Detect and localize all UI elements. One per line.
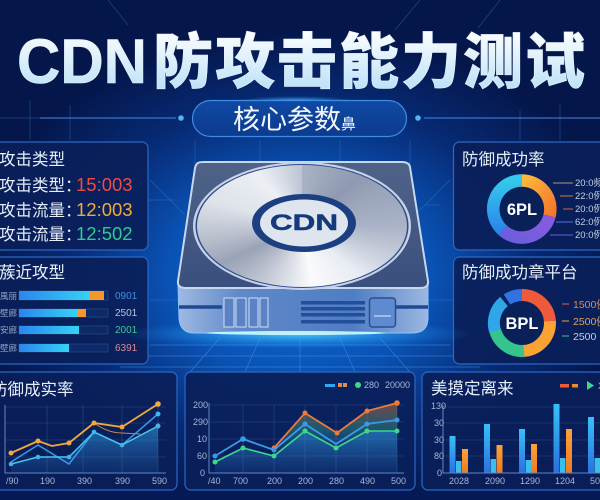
CDN badge [252,194,356,252]
base light [206,331,386,335]
vents [224,298,268,327]
line chart 1: /90 [6,476,19,486]
donut chart 1 [493,180,550,238]
bar chart 3: 0 [437,468,442,478]
heading: chart 3: 美摸定离来 [431,379,514,398]
legend [325,380,410,390]
line chart 1: 190 [40,476,55,486]
subtitle pill [40,96,600,136]
port button [370,298,396,327]
line chart 1: 590 [152,476,167,486]
donut legend 1 [550,177,600,241]
bar chart: 壁廊 [0,343,18,353]
legend [560,381,600,391]
line chart 2: 60 [197,451,207,461]
title: 防攻击能力测试 [153,29,587,96]
bar chart: 風丽 [0,291,18,301]
heading: platform: 防御成功章平台 [462,263,578,282]
bar chart: 壁廊 [0,308,18,318]
bar chart: 6391 [115,343,138,354]
line chart 2: 200 [267,476,282,486]
donut chart 2 [494,295,550,351]
line chart 2: 700 [233,476,248,486]
bar chart 3: 1290 [520,476,540,486]
disc [193,162,411,290]
bar chart 3: 130 [431,401,446,411]
line chart 2: /40 [208,476,221,486]
heading: attack type: 攻击类型 [0,150,65,169]
legend: 280 [364,380,379,390]
glow [123,319,473,349]
line chart 2: 200 [193,400,208,410]
bar chart 3 [431,401,600,486]
metric rows: 攻击流量： [0,225,82,244]
panel: defense success rate [454,142,600,250]
metric rows: 攻击类型： [0,176,82,195]
line chart 2: 280 [329,476,344,486]
panel: attack type [0,142,148,250]
line chart 2 [193,400,406,486]
donut legend 2: 2500 [573,331,597,343]
legend: 20000 [385,380,410,390]
bar chart 3: 1204 [555,476,575,486]
panel: line chart 1 [0,372,177,490]
central CDN device [123,162,473,349]
bar chart 3: 30 [434,418,444,428]
bar chart 3: 80 [434,451,444,461]
heading: bars: 蔟近攻型 [0,263,65,282]
metric rows [0,174,133,244]
device body [178,285,428,333]
bar chart 3: 2090 [485,476,505,486]
donut legend 2 [562,298,600,343]
panel: bar chart 3 [422,372,600,490]
bar chart: 0901 [115,291,138,302]
bar chart: 安廊 [0,325,18,335]
donut chart 2: BPL [506,315,538,333]
bar chart 3: 30 [434,435,444,445]
metric rows: 攻击流量： [0,201,82,220]
title: CDN [17,27,147,97]
heading: success rate: 防御成功率 [462,150,544,169]
bar chart [0,291,138,354]
donut chart 1: 6PL [507,201,537,219]
subtitle pill: 核心参数鼻 [233,105,356,135]
bar chart 3: 2028 [449,476,469,486]
line chart 2: 200 [298,476,313,486]
grille [301,301,365,324]
line chart 1: 390 [115,476,130,486]
line chart 1 [5,401,167,486]
bar chart: 2001 [115,325,138,336]
line chart 2: 10 [197,434,207,444]
metric rows: 12:502 [76,223,133,244]
metric rows: 12:003 [76,199,133,220]
line chart 2: 290 [193,417,208,427]
line chart 2: 500 [391,476,406,486]
line chart 1: 390 [77,476,92,486]
metric rows: 15:003 [76,174,133,195]
panel: attack type bars [0,257,148,364]
device top plate [178,162,428,288]
line chart 2: 490 [360,476,375,486]
bar chart: 2501 [115,308,138,319]
line chart 2: 0 [200,468,205,478]
CDN badge: CDN [270,210,338,235]
panel: line chart 2 [185,372,415,490]
panel: defense platform [454,257,600,364]
